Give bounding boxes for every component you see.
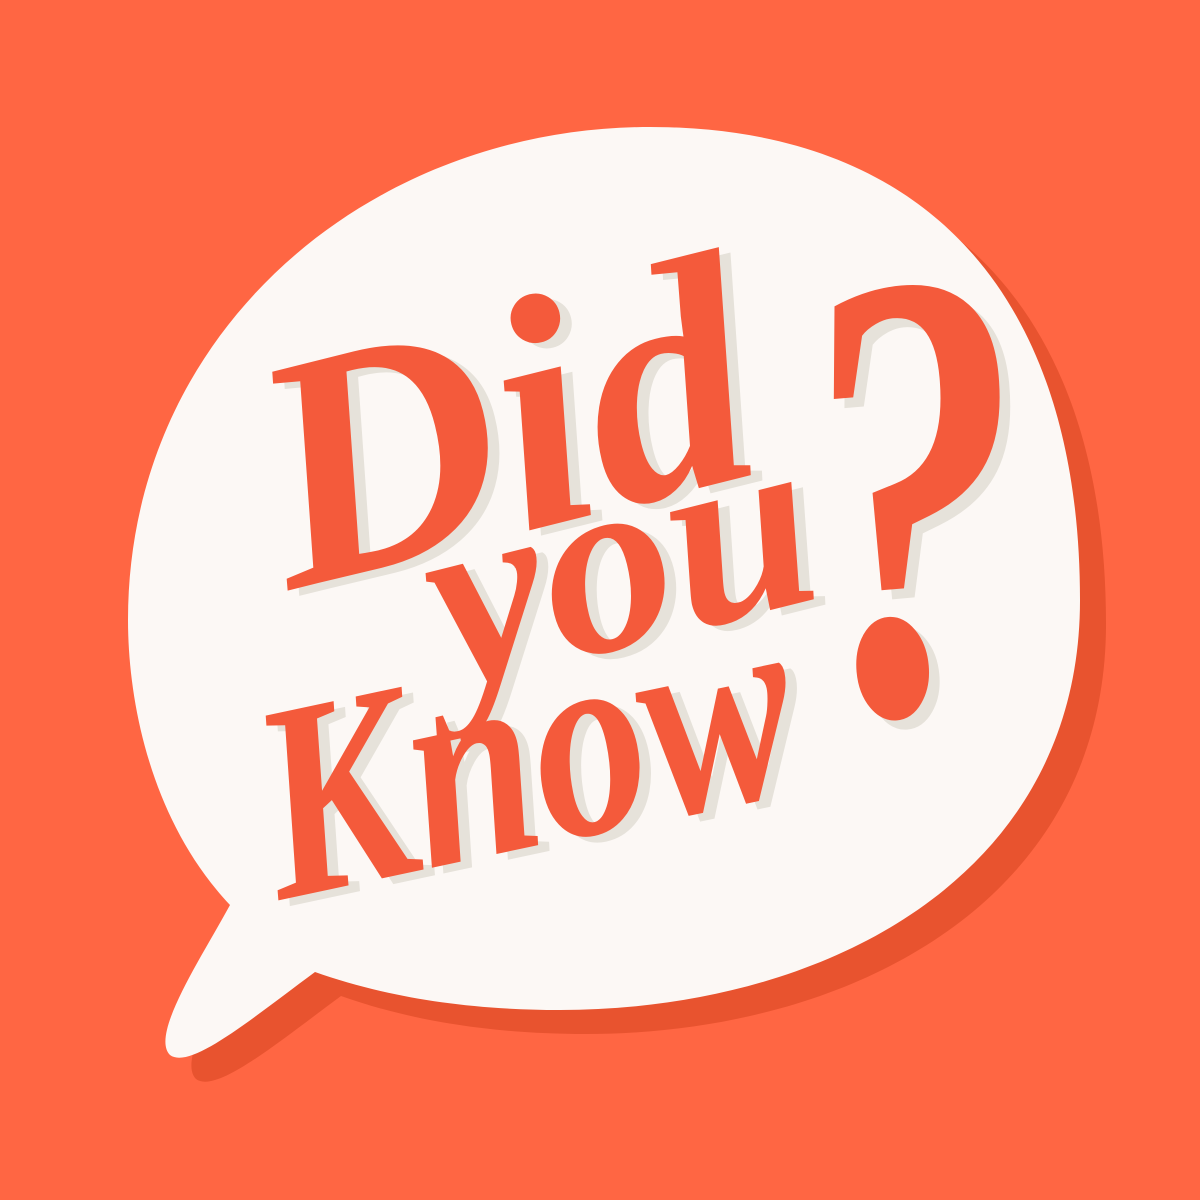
speech bubble xyxy=(128,127,1080,1058)
question mark: ? xyxy=(781,141,1066,866)
question mark: ? xyxy=(770,132,1055,856)
word: Know: Know xyxy=(225,543,822,960)
word: Did: Did xyxy=(214,185,793,661)
word: Know: Know xyxy=(236,549,833,966)
word: you: you xyxy=(378,377,854,758)
speech bubble shadow xyxy=(154,151,1106,1082)
word: Did: Did xyxy=(226,190,804,666)
word: you: you xyxy=(367,372,842,752)
headline: Did you Know? xyxy=(214,131,1066,968)
